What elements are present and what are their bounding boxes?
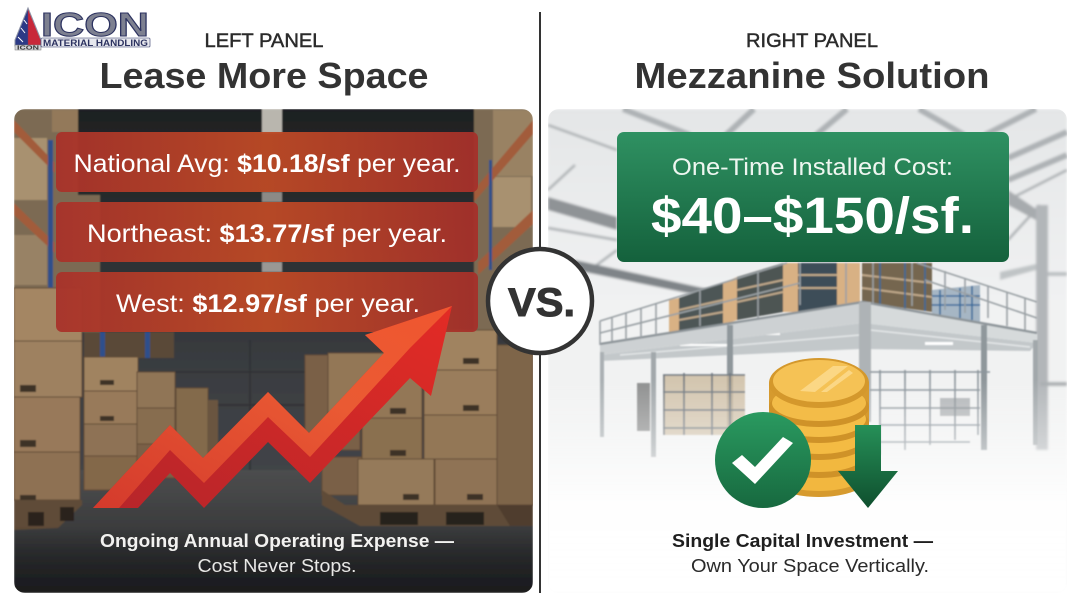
- caption: single capital investment: Own Your Space Vertically.: [691, 555, 929, 576]
- caption: single capital investment: Single Capital Investment —: [672, 530, 934, 551]
- panel: lease more space: [14, 109, 533, 593]
- cost card: national average: National Avg: $10.18/sf per year.: [74, 150, 460, 178]
- icon: rising red arrow: [93, 306, 452, 508]
- panel: mezzanine solution: [548, 109, 1067, 593]
- icon: gold coin stack: [769, 358, 869, 497]
- cost card: one-time installed cost: $40–$150/sf.: [651, 187, 974, 244]
- icon: green check badge: [715, 412, 811, 508]
- heading: right panel: Mezzanine Solution: [634, 55, 990, 96]
- deck edge: [600, 302, 863, 355]
- caption: single capital investment: [672, 530, 934, 576]
- deck underside: [600, 323, 1037, 361]
- vs badge: [488, 249, 592, 353]
- divider line: [539, 12, 541, 593]
- cost card: national average: [56, 132, 478, 192]
- cost card: west: [56, 272, 478, 332]
- heading: right panel: [634, 31, 990, 96]
- cost card: northeast: Northeast: $13.77/sf per year.: [87, 220, 447, 248]
- cost card: one-time installed cost: One-Time Installed Cost:: [672, 154, 953, 181]
- logo: Icon Material Handling: ICON: [41, 6, 149, 43]
- heading: right panel: RIGHT PANEL: [746, 31, 878, 52]
- mezzanine warehouse photo background: [548, 109, 1067, 458]
- caption: ongoing expense: [100, 530, 455, 576]
- warehouse photo background: [14, 109, 533, 593]
- cost card: west: West: $12.97/sf per year.: [116, 290, 420, 318]
- mezzanine shelving: [679, 283, 723, 331]
- cost card: northeast: [56, 202, 478, 262]
- icon: green down arrow: [838, 425, 898, 508]
- logo: Icon Material Handling: MATERIAL HANDLING: [43, 38, 148, 48]
- cost card: one-time installed cost: [617, 132, 1009, 262]
- logo: Icon Material Handling: [15, 6, 150, 52]
- caption: ongoing expense: Ongoing Annual Operating Expense —: [100, 530, 455, 551]
- vs badge: VS.: [508, 281, 575, 325]
- heading: left panel: Lease More Space: [100, 55, 428, 96]
- heading: left panel: LEFT PANEL: [204, 31, 324, 52]
- caption: ongoing expense: Cost Never Stops.: [198, 555, 356, 576]
- logo: Icon Material Handling: ICON: [17, 46, 40, 52]
- heading: left panel: [100, 31, 428, 96]
